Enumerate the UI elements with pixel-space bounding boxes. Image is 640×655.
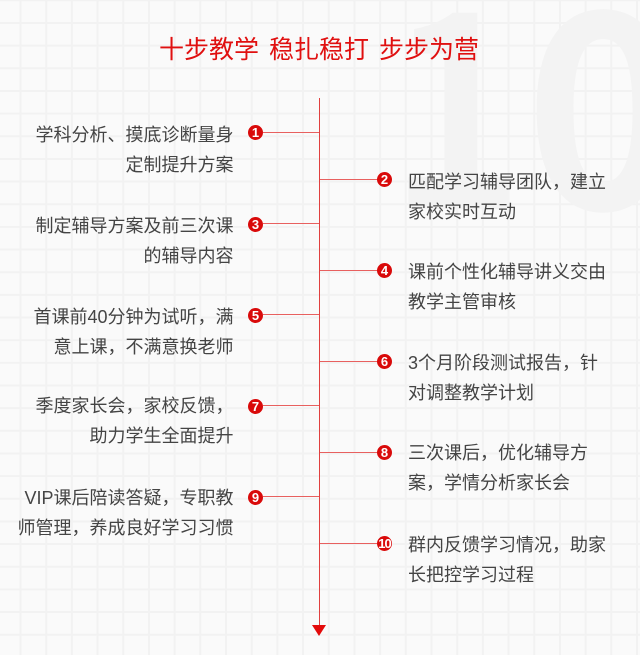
step 6 (320, 353, 598, 403)
timeline axis (319, 98, 320, 628)
step 4: 教学主管审核 (408, 292, 516, 312)
step 10: 群内反馈学习情况，助家 (408, 535, 606, 555)
step 9: 师管理，养成良好学习习惯 (18, 518, 234, 538)
step 9: VIP课后陪读答疑，专职教 (24, 488, 234, 508)
step 1: 学科分析、摸底诊断量身 (36, 125, 234, 145)
step 1 (36, 125, 319, 175)
step 3: 3 (252, 217, 259, 232)
step 10: 长把控学习过程 (408, 565, 534, 585)
step 7: 季度家长会，家校反馈， (36, 396, 234, 416)
step 9 (18, 488, 319, 538)
step 7 (36, 396, 319, 446)
step 8 (320, 443, 588, 493)
step 3: 的辅导内容 (144, 246, 234, 266)
step 3: 制定辅导方案及前三次课 (36, 216, 234, 236)
step 5: 意上课，不满意换老师 (54, 337, 234, 357)
step 10 (320, 535, 606, 585)
step 6: 3个月阶段测试报告，针 (408, 353, 598, 373)
step 6: 对调整教学计划 (408, 383, 534, 403)
step 8: 三次课后，优化辅导方 (408, 443, 588, 463)
step 9: 9 (252, 490, 259, 505)
step 8: 8 (381, 445, 388, 460)
step 2: 2 (381, 172, 388, 187)
step 5: 首课前40分钟为试听，满 (33, 307, 234, 327)
step 2 (320, 172, 606, 222)
timeline arrowhead (312, 625, 326, 636)
step 1: 定制提升方案 (126, 155, 234, 175)
step 4: 4 (381, 263, 388, 278)
step 4 (320, 262, 606, 312)
step 4: 课前个性化辅导讲义交由 (408, 262, 606, 282)
step 5 (33, 307, 319, 357)
step 7: 助力学生全面提升 (90, 426, 234, 446)
step 5: 5 (252, 308, 259, 323)
step 6: 6 (381, 354, 388, 369)
step 3 (36, 216, 319, 266)
title: 十步教学 稳扎稳打 步步为营 (159, 36, 479, 64)
step 7: 7 (252, 399, 259, 414)
step 2: 匹配学习辅导团队，建立 (408, 172, 606, 192)
step 10: 10 (378, 536, 391, 551)
step 1: 1 (252, 125, 259, 140)
step 8: 案，学情分析家长会 (408, 473, 570, 493)
step 2: 家校实时互动 (408, 202, 516, 222)
